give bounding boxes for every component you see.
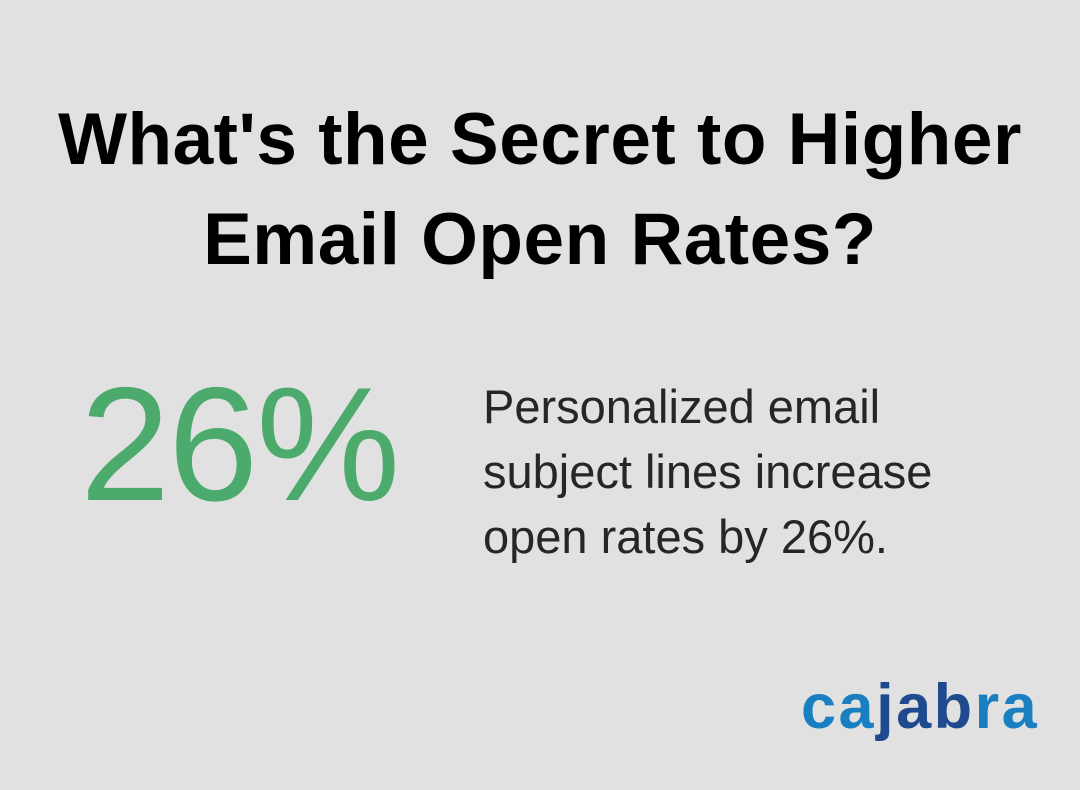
description text (483, 380, 932, 563)
title: What's the Secret to Higher (58, 99, 1022, 180)
title (58, 99, 1022, 280)
description text: subject lines increase (483, 445, 932, 498)
description text: Personalized email (483, 380, 880, 433)
logo: cajabra: cajabra (801, 672, 1039, 742)
title: Email Open Rates? (203, 199, 877, 280)
statistic: 26%: 26% (80, 354, 398, 535)
description text: open rates by 26%. (483, 510, 888, 563)
